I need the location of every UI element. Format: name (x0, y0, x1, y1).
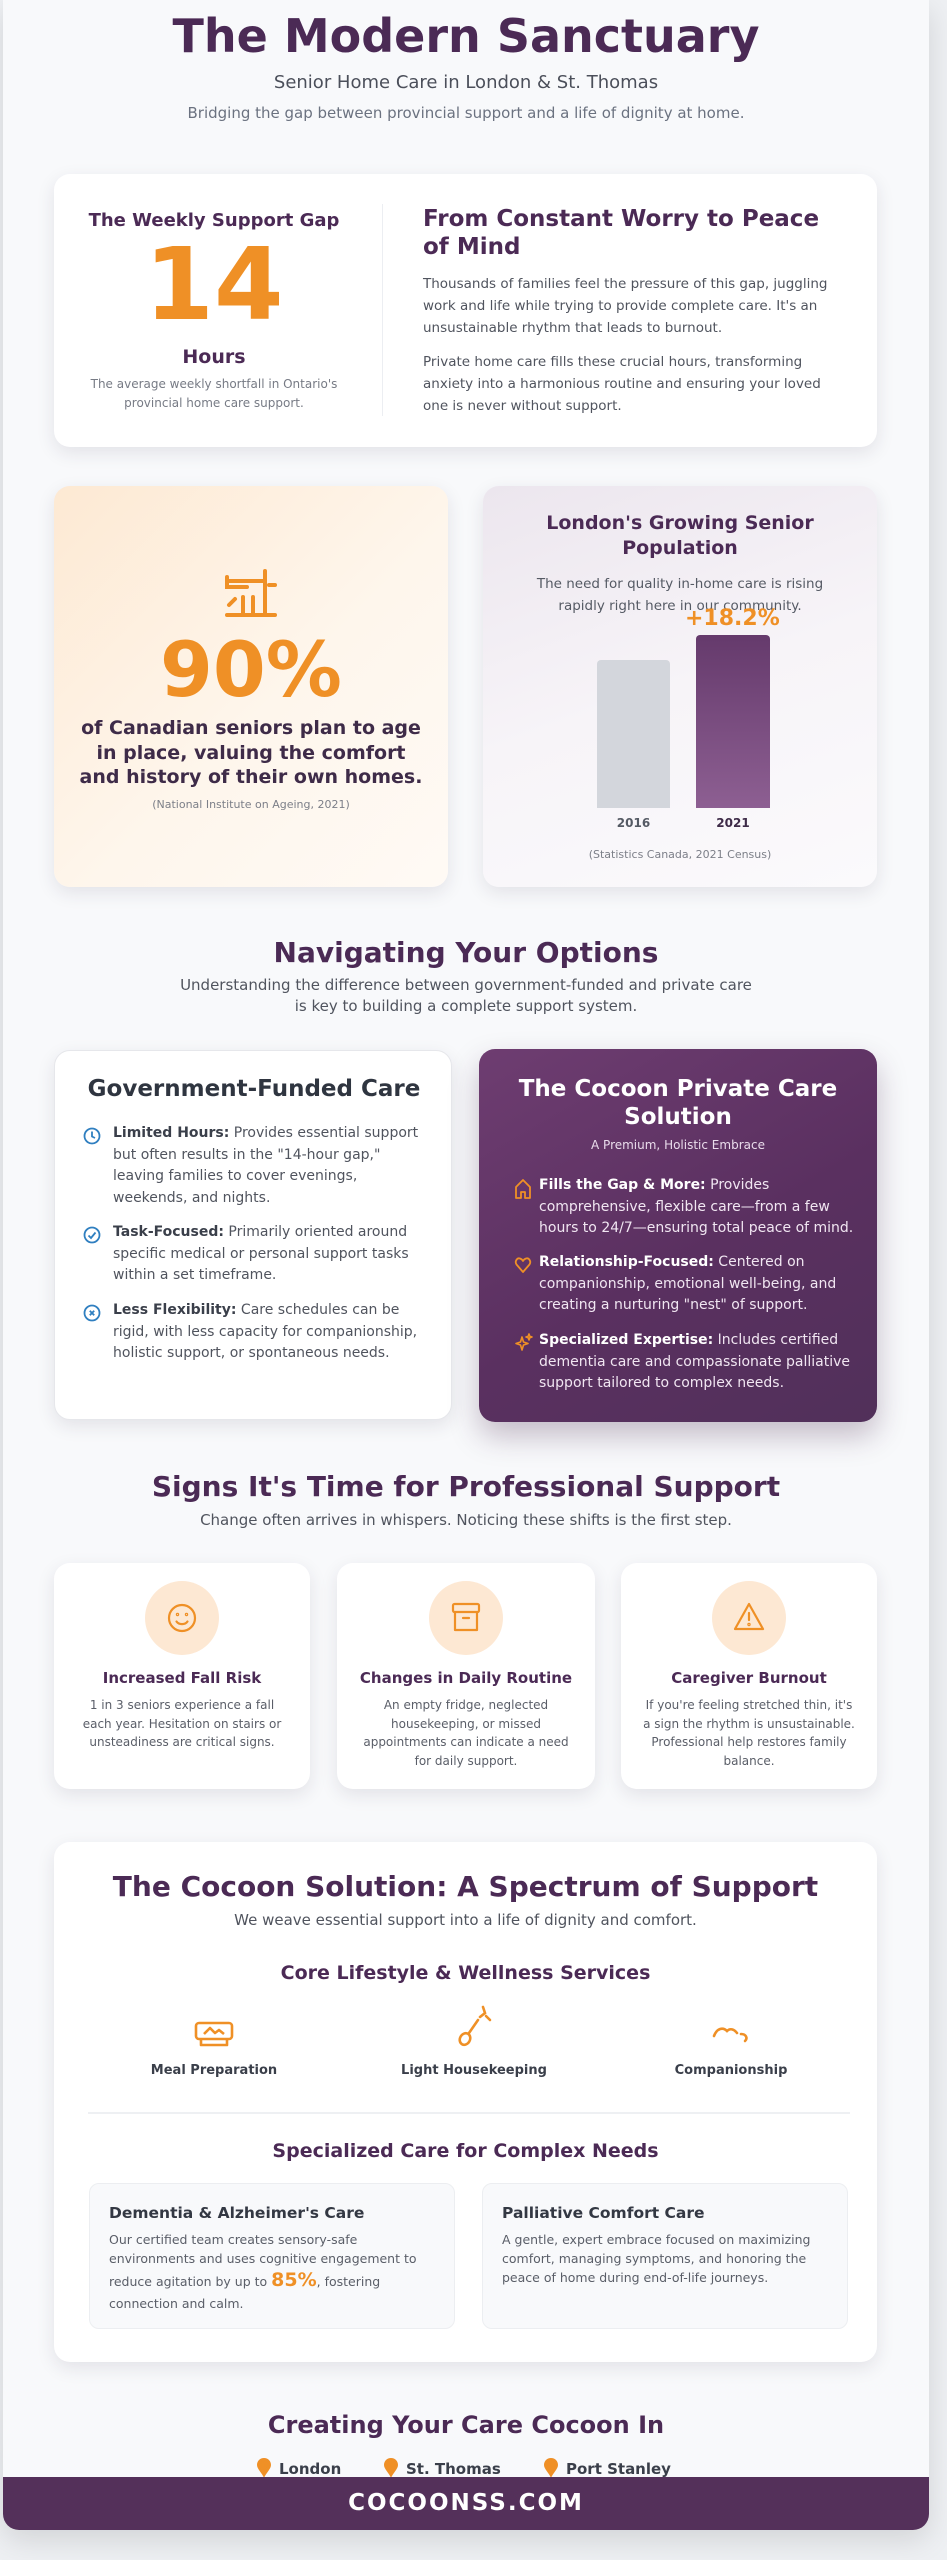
text (83, 1698, 282, 1749)
item: limited hours (84, 1125, 418, 1206)
text: for daily support. (415, 1754, 517, 1768)
icon: meal (194, 2022, 234, 2046)
icon: check circle (84, 1226, 100, 1244)
item: less flexibility: holistic support, or spontaneous needs. (113, 1345, 390, 1361)
text: An empty fridge, neglected (384, 1698, 548, 1712)
card: daily routine (337, 1563, 595, 1789)
footer (3, 2477, 929, 2530)
title: Changes in Daily Routine (360, 1669, 572, 1687)
chart description (536, 576, 823, 614)
item: fills the gap (515, 1177, 853, 1236)
big stat 90%: 90% (160, 625, 342, 714)
card: palliative care: Palliative Comfort Care (502, 2204, 705, 2222)
item: specialized expertise: Specialized Expertise: Includes certified (539, 1332, 838, 1348)
item: limited hours: weekends, and nights. (113, 1190, 270, 1206)
card: dementia care: environments and uses cognitive engagement to (109, 2251, 417, 2266)
card: palliative care: peace of home during end-of-life journeys. (502, 2270, 768, 2285)
citation: (National Institute on Ageing, 2021) (152, 798, 350, 811)
intro text (180, 976, 752, 1015)
title: Increased Fall Risk (103, 1669, 261, 1687)
text: unsteadiness are critical signs. (89, 1735, 275, 1749)
paragraph 2: one is never without support. (423, 398, 622, 414)
card: fall risk (54, 1563, 310, 1789)
item: limited hours: but often results in the "14-hour gap," (113, 1147, 380, 1163)
signs intro: Change often arrives in whispers. Noticing these shifts is the first step. (200, 1511, 732, 1529)
item: task-focused: within a set timeframe. (113, 1267, 276, 1283)
tagline: Bridging the gap between provincial support and a life of dignity at home. (188, 104, 744, 122)
paragraph 2 (423, 354, 821, 414)
service: light housekeeping: Light Housekeeping (401, 2063, 547, 2078)
icon: sparkles (515, 1333, 533, 1351)
paragraph 1: work and life while trying to provide complete care. It's an (423, 298, 817, 314)
card: dementia care: connection and calm. (109, 2296, 244, 2311)
item: relationship-focused: companionship, emotional well-being, and (539, 1276, 836, 1292)
icon: companionship (712, 2027, 748, 2042)
bar 2016 (597, 660, 670, 808)
paragraph 2: anxiety into a harmonious routine and ensuring your loved (423, 376, 821, 392)
panel: government-funded care (54, 1050, 452, 1420)
chart heading (546, 512, 814, 559)
icon: x circle (84, 1304, 100, 1322)
subtitle: Senior Home Care in London & St. Thomas (274, 72, 658, 93)
heading: peace of mind: From Constant Worry to Peace (423, 206, 819, 232)
stat description: in place, valuing the comfort (96, 742, 406, 764)
location: London (257, 2458, 341, 2478)
item: less flexibility (84, 1302, 417, 1361)
icon: home (515, 1179, 531, 1199)
heading (518, 1076, 837, 1130)
service: meal preparation (151, 2022, 277, 2078)
item: fills the gap: comprehensive, flexible care—from a few (539, 1199, 830, 1215)
heading: Solution (624, 1104, 732, 1130)
card: dementia care: Dementia & Alzheimer's Care (109, 2204, 364, 2222)
label 2021: 2021 (716, 816, 750, 830)
stat heading: The Weekly Support Gap (89, 210, 339, 231)
chart heading: Population (622, 537, 738, 559)
service: light housekeeping (401, 2006, 547, 2078)
caption (90, 377, 337, 410)
subheading: A Premium, Holistic Embrace (591, 1138, 765, 1152)
item: fills the gap: hours to 24/7—ensuring total peace of mind. (539, 1220, 853, 1236)
text: Professional help restores family (651, 1735, 847, 1749)
text: balance. (723, 1754, 775, 1768)
card: palliative care: A gentle, expert embrace focused on maximizing (502, 2232, 810, 2247)
icon: warning (712, 1581, 786, 1655)
heading: peace of mind (423, 206, 819, 260)
panel: weekly support gap (54, 174, 877, 447)
paragraph 1: Thousands of families feel the pressure of this gap, juggling (423, 276, 828, 292)
heading: signs it's time: Signs It's Time for Professional Support (152, 1470, 780, 1503)
service: meal preparation: Meal Preparation (151, 2063, 277, 2078)
card: dementia care: reduce agitation by up to 85%, fostering (109, 2269, 380, 2291)
item: task-focused: Task-Focused: Primarily oriented around (113, 1224, 407, 1240)
location: St. Thomas: St. Thomas (406, 2460, 501, 2478)
growth label: +18.2% (685, 606, 780, 631)
card: dementia care: Our certified team creates sensory-safe (109, 2232, 357, 2247)
heading: navigating your options: Navigating Your Options (274, 936, 658, 969)
intro text: is key to building a complete support system. (295, 997, 637, 1015)
panel: cocoon private care (479, 1049, 877, 1422)
text (643, 1698, 855, 1768)
footer: COCOONSS.COM (348, 2490, 584, 2516)
item: specialized expertise (515, 1332, 850, 1391)
icon: house chart (225, 569, 277, 617)
item: limited hours: Limited Hours: Provides essential support (113, 1125, 418, 1141)
intro text: Understanding the difference between government-funded and private care (180, 976, 752, 994)
item: less flexibility: rigid, with less capacity for companionship, (113, 1324, 417, 1340)
heading: core services: Core Lifestyle & Wellness Services (281, 1962, 650, 1984)
icon: clock (84, 1128, 100, 1144)
chart heading: London's Growing Senior (546, 512, 814, 534)
heading: creating your care cocoon: Creating Your Care Cocoon In (268, 2411, 664, 2439)
item: relationship-focused: creating a nurturing "nest" of support. (539, 1297, 807, 1313)
chart citation: (Statistics Canada, 2021 Census) (589, 848, 771, 861)
service: companionship: Companionship (675, 2063, 787, 2078)
item: specialized expertise: support tailored to complex needs. (539, 1375, 784, 1391)
text (363, 1698, 569, 1768)
heading: The Cocoon Private Care (519, 1076, 837, 1102)
stat description: and history of their own homes. (80, 766, 422, 788)
panel: growing senior population (483, 486, 877, 887)
stat description: of Canadian seniors plan to age (81, 717, 421, 739)
service: companionship (675, 2027, 787, 2078)
icon: broom (458, 2006, 492, 2046)
item: specialized expertise: dementia care and compassionate palliative (539, 1354, 850, 1370)
item: relationship-focused: Relationship-Focused: Centered on (539, 1254, 805, 1270)
hours label: Hours (182, 346, 246, 368)
caption: The average weekly shortfall in Ontario's (91, 377, 337, 391)
location: London: London (279, 2460, 341, 2478)
heading: Government-Funded Care (88, 1076, 420, 1102)
heading: specialized care: Specialized Care for Complex Needs (272, 2140, 659, 2162)
paragraph 1: unsustainable rhythm that leads to burnout. (423, 320, 722, 336)
subheading: We weave essential support into a life of dignity and comfort. (234, 1911, 697, 1929)
stat description (80, 717, 422, 788)
location: Port Stanley: Port Stanley (566, 2460, 671, 2478)
title: Caregiver Burnout (671, 1669, 827, 1687)
item: limited hours: leaving families to cover evenings, (113, 1168, 357, 1184)
bar 2021 (696, 635, 770, 808)
item: less flexibility: Less Flexibility: Care schedules can be (113, 1302, 399, 1318)
icon: heart (514, 1257, 532, 1273)
paragraph 1 (422, 276, 828, 336)
icon: smiley (145, 1581, 219, 1655)
caption: provincial home care support. (124, 396, 304, 410)
text: If you're feeling stretched thin, it's (646, 1698, 852, 1712)
panel: cocoon solution spectrum (54, 1842, 877, 2362)
panel: 90% age in place (54, 486, 448, 887)
big number 14: 14 (144, 226, 284, 343)
text: each year. Hesitation on stairs or (83, 1717, 281, 1731)
item: fills the gap: Fills the Gap & More: Provides (539, 1177, 769, 1193)
card: palliative care (482, 2183, 848, 2329)
icon: box (429, 1581, 503, 1655)
text: 1 in 3 seniors experience a fall (90, 1698, 274, 1712)
item: task-focused: specific medical or personal support tasks (113, 1246, 409, 1262)
card: caregiver burnout (621, 1563, 877, 1789)
bar chart (597, 606, 780, 830)
heading: The Cocoon Solution: A Spectrum of Support (113, 1870, 818, 1903)
text: housekeeping, or missed (391, 1717, 541, 1731)
card: dementia care (89, 2183, 455, 2329)
item: task-focused (84, 1224, 409, 1283)
heading: peace of mind: of Mind (423, 234, 520, 260)
chart description: The need for quality in-home care is rising (537, 576, 823, 592)
paragraph 2: Private home care fills these crucial hours, transforming (423, 354, 802, 370)
title: The Modern Sanctuary (173, 9, 759, 63)
chart description: rapidly right here in our community. (558, 598, 802, 614)
text: a sign the rhythm is unsustainable. (643, 1717, 855, 1731)
label 2016: 2016 (617, 816, 650, 830)
locations list (257, 2458, 671, 2478)
item: relationship-focused (514, 1254, 836, 1313)
card: palliative care: comfort, managing symptoms, and honoring the (502, 2251, 806, 2266)
text: appointments can indicate a need (363, 1735, 569, 1749)
